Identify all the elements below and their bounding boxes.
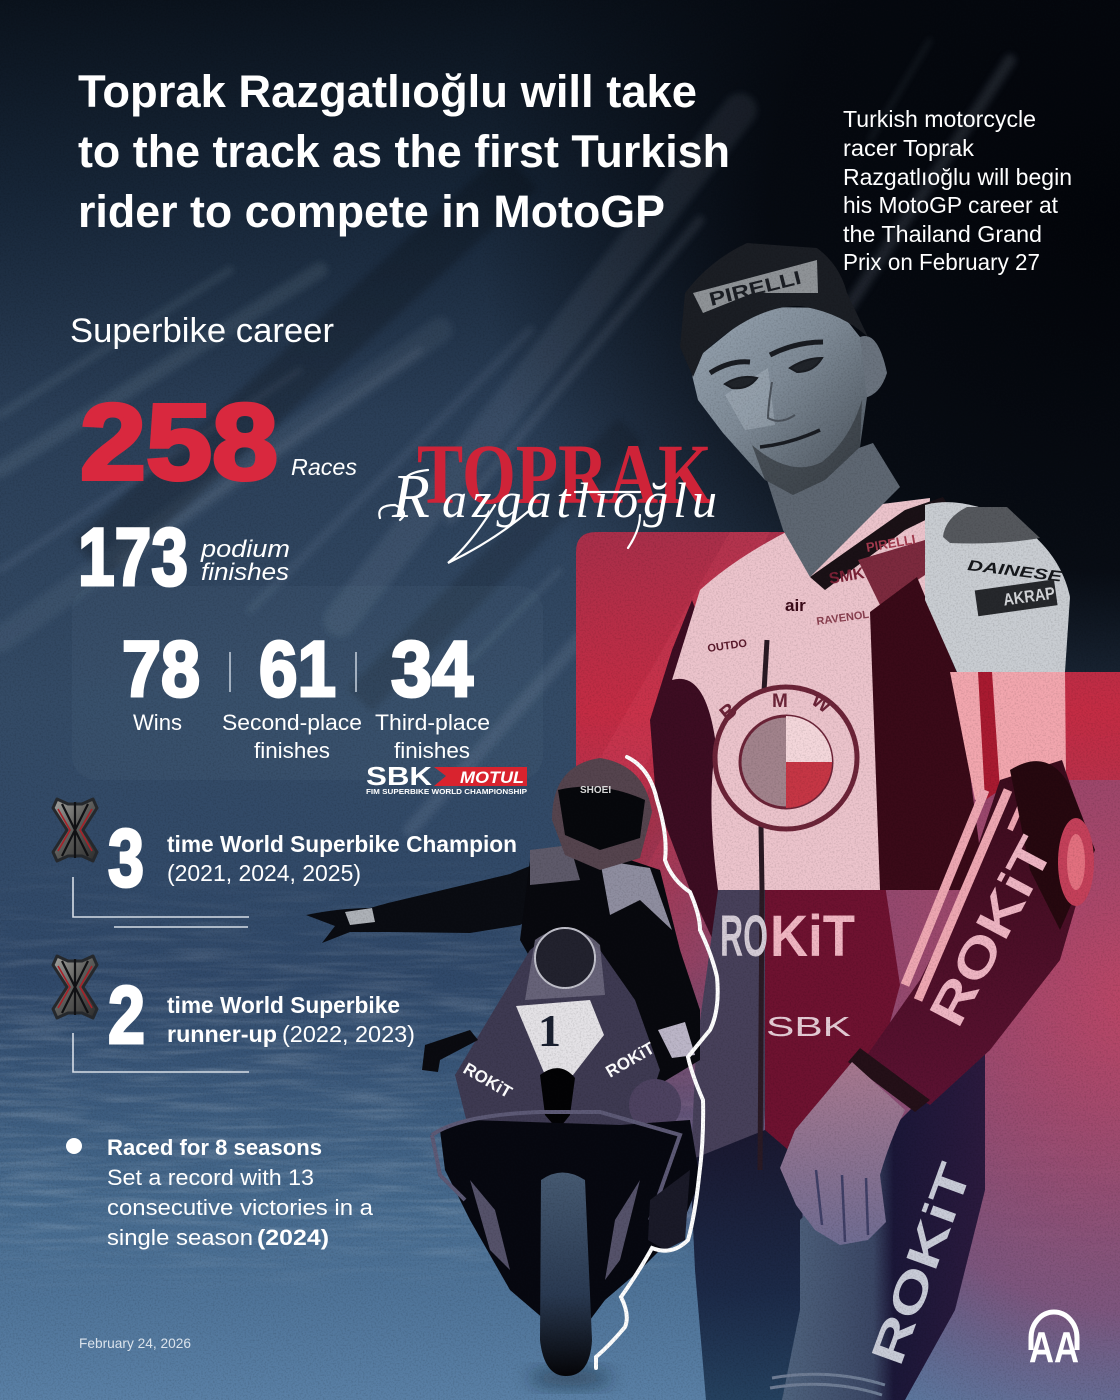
bullet [66, 1138, 82, 1154]
suit logos: AKRAP [1002, 584, 1056, 610]
stat: 78 wins: Wins [133, 710, 182, 735]
wrist cuff [848, 1048, 930, 1112]
illustration: rider on bike: ROKiT [602, 1038, 658, 1081]
cap: PIRELLI [707, 268, 803, 311]
eyes and brows [710, 342, 823, 447]
champion block [53, 799, 517, 927]
title: to the track as the first Turkish [78, 126, 730, 177]
name lockup [379, 426, 722, 563]
face [692, 307, 867, 495]
number 2: 2 [108, 970, 145, 1061]
intro text: Turkish motorcycle [843, 106, 1036, 132]
BMW roundel [715, 687, 857, 829]
intro text: Prix on February 27 [843, 249, 1040, 275]
finger lines [816, 1170, 868, 1242]
helmet: SHOEI [580, 785, 611, 796]
number plate [516, 1000, 604, 1075]
number 3: 3 [108, 813, 144, 904]
chest side red [950, 672, 1066, 800]
name lockup: TOPRAK [417, 426, 712, 522]
stat: 34 third place: finishes [394, 738, 470, 763]
stat: 173 podium finishes: finishes [201, 559, 289, 586]
title: Toprak Razgatlıoğlu will take [78, 66, 697, 117]
lower bike [440, 1120, 700, 1320]
intro text: the Thailand Grand [843, 221, 1042, 247]
left arm [650, 600, 760, 960]
windscreen [525, 929, 605, 1000]
record text: (2024) [257, 1225, 329, 1250]
sleeve stripes [905, 785, 1030, 1000]
record text: Raced for 8 seasons [107, 1135, 322, 1160]
side boot [648, 1170, 690, 1250]
cap [680, 243, 868, 377]
front tire [540, 1172, 592, 1376]
white outline ribbon [596, 757, 718, 1368]
hand on bar [658, 1022, 695, 1058]
intro text [843, 106, 1072, 275]
logo: AA [1029, 1312, 1079, 1372]
stat: 258 races [80, 381, 357, 502]
shoulder cup [943, 507, 1040, 543]
stat: 34 third place: Third-place [375, 710, 490, 735]
suit logos: SMK [828, 565, 866, 588]
elbow slider [1010, 761, 1095, 930]
logo: SBK Motul: FIM SUPERBIKE WORLD CHAMPIONSHIP [366, 787, 527, 796]
collar [810, 497, 950, 590]
runner-up block [53, 956, 415, 1072]
icon: medal [53, 799, 97, 861]
rider arm [306, 850, 590, 943]
logo: SBK Motul: SBK [366, 761, 432, 791]
date: February 24, 2026 [79, 1335, 191, 1351]
suit logos: DAINESE [967, 557, 1064, 586]
title: rider to compete in MotoGP [78, 186, 665, 237]
chest dark V [858, 540, 925, 605]
mirror knee [629, 1079, 681, 1131]
BMW roundel: W [807, 689, 835, 718]
right leg [782, 1050, 985, 1400]
illustration: rider on bike [306, 758, 700, 1386]
nose [540, 1068, 575, 1130]
rider body [520, 850, 700, 1090]
logo: SBK Motul: MOTUL [460, 768, 524, 787]
record text: Set a record with 13 [107, 1165, 314, 1190]
intro text: his MotoGP career at [843, 192, 1059, 218]
record block [66, 1135, 374, 1250]
runner-up text: time World Superbike [167, 992, 400, 1018]
suit torso [672, 498, 930, 890]
helmet [552, 758, 652, 870]
name lockup: R [391, 463, 430, 531]
ear [860, 336, 887, 398]
neck [767, 443, 900, 577]
shoulder [925, 502, 1070, 672]
stat: 61 second place: Second-place [222, 710, 362, 735]
intro text: racer Toprak [843, 135, 975, 161]
shadow [528, 1370, 612, 1386]
champion text: (2021, 2024, 2025) [167, 860, 361, 886]
champion text: time World Superbike Champion [167, 831, 517, 857]
stat: 34 third place: 34 [391, 624, 473, 713]
illustration: Toprak portrait [650, 243, 1095, 1400]
stat: 61 second place: 61 [259, 624, 336, 713]
stat: 173 podium finishes: podium [200, 536, 290, 563]
runner-up text: (2022, 2023) [282, 1021, 415, 1047]
red panel [560, 532, 1120, 1400]
hand [780, 1062, 905, 1245]
suit logos: PIRELLI [865, 532, 917, 555]
zipper [760, 640, 767, 1170]
suit logos: ROKiT [861, 1156, 981, 1371]
intro text: Razgatlıoğlu will begin [843, 164, 1072, 190]
dark flank [870, 577, 985, 890]
side panels [470, 1180, 640, 1280]
stat: 258 races: Races [291, 454, 357, 480]
suit logos: OUTDO [707, 637, 748, 655]
glove highlight [345, 908, 375, 925]
BMW roundel: M [772, 691, 788, 712]
record text: single season [107, 1225, 253, 1250]
record text: consecutive victories in a [107, 1195, 374, 1220]
stubble [752, 400, 862, 495]
stat: 34 third place [375, 624, 490, 763]
runner-up text [167, 992, 415, 1047]
suit logos: air [785, 596, 806, 615]
suit logos: SBK [766, 1011, 851, 1042]
lower torso [690, 885, 900, 1180]
handlebar [422, 1030, 478, 1072]
stat: 173 podium finishes [78, 512, 290, 603]
icon: medal [53, 956, 97, 1018]
stat panel backdrop [72, 586, 543, 780]
wing bars [432, 1112, 680, 1220]
suit logos: RO [720, 904, 768, 969]
stat: 78 wins: 78 [122, 624, 200, 713]
fairing logos: ROKiT [460, 1059, 516, 1102]
knee ribbing [770, 1374, 885, 1395]
suit logos: RAVENOL [816, 609, 870, 628]
champion text [167, 831, 517, 886]
tank roundel [535, 928, 595, 988]
stat: 61 second place: finishes [254, 738, 330, 763]
stat: 258 races: 258 [80, 381, 278, 502]
heading: Superbike career: Superbike career [70, 312, 334, 350]
suit logos: ROKiT [918, 828, 1064, 1035]
name lockup: azgatlıoğlu [442, 472, 722, 528]
stat: 61 second place [222, 624, 362, 763]
stat: 173 podium finishes: 173 [78, 512, 188, 603]
suit logos: KiT [770, 904, 855, 969]
record text [107, 1135, 374, 1250]
runner-up text: runner-up [167, 1021, 277, 1047]
BMW roundel: B [715, 698, 742, 726]
suit logos [707, 532, 1064, 1371]
right arm [860, 760, 1092, 1105]
cheek highlight [725, 368, 775, 430]
logo: AA: AA [1029, 1323, 1079, 1372]
bike fairing [455, 935, 660, 1135]
logo: SBK Motul [366, 761, 527, 796]
title [78, 66, 730, 237]
left leg [690, 1130, 806, 1400]
suit white panels [600, 860, 672, 930]
number: 1 [538, 1005, 561, 1056]
